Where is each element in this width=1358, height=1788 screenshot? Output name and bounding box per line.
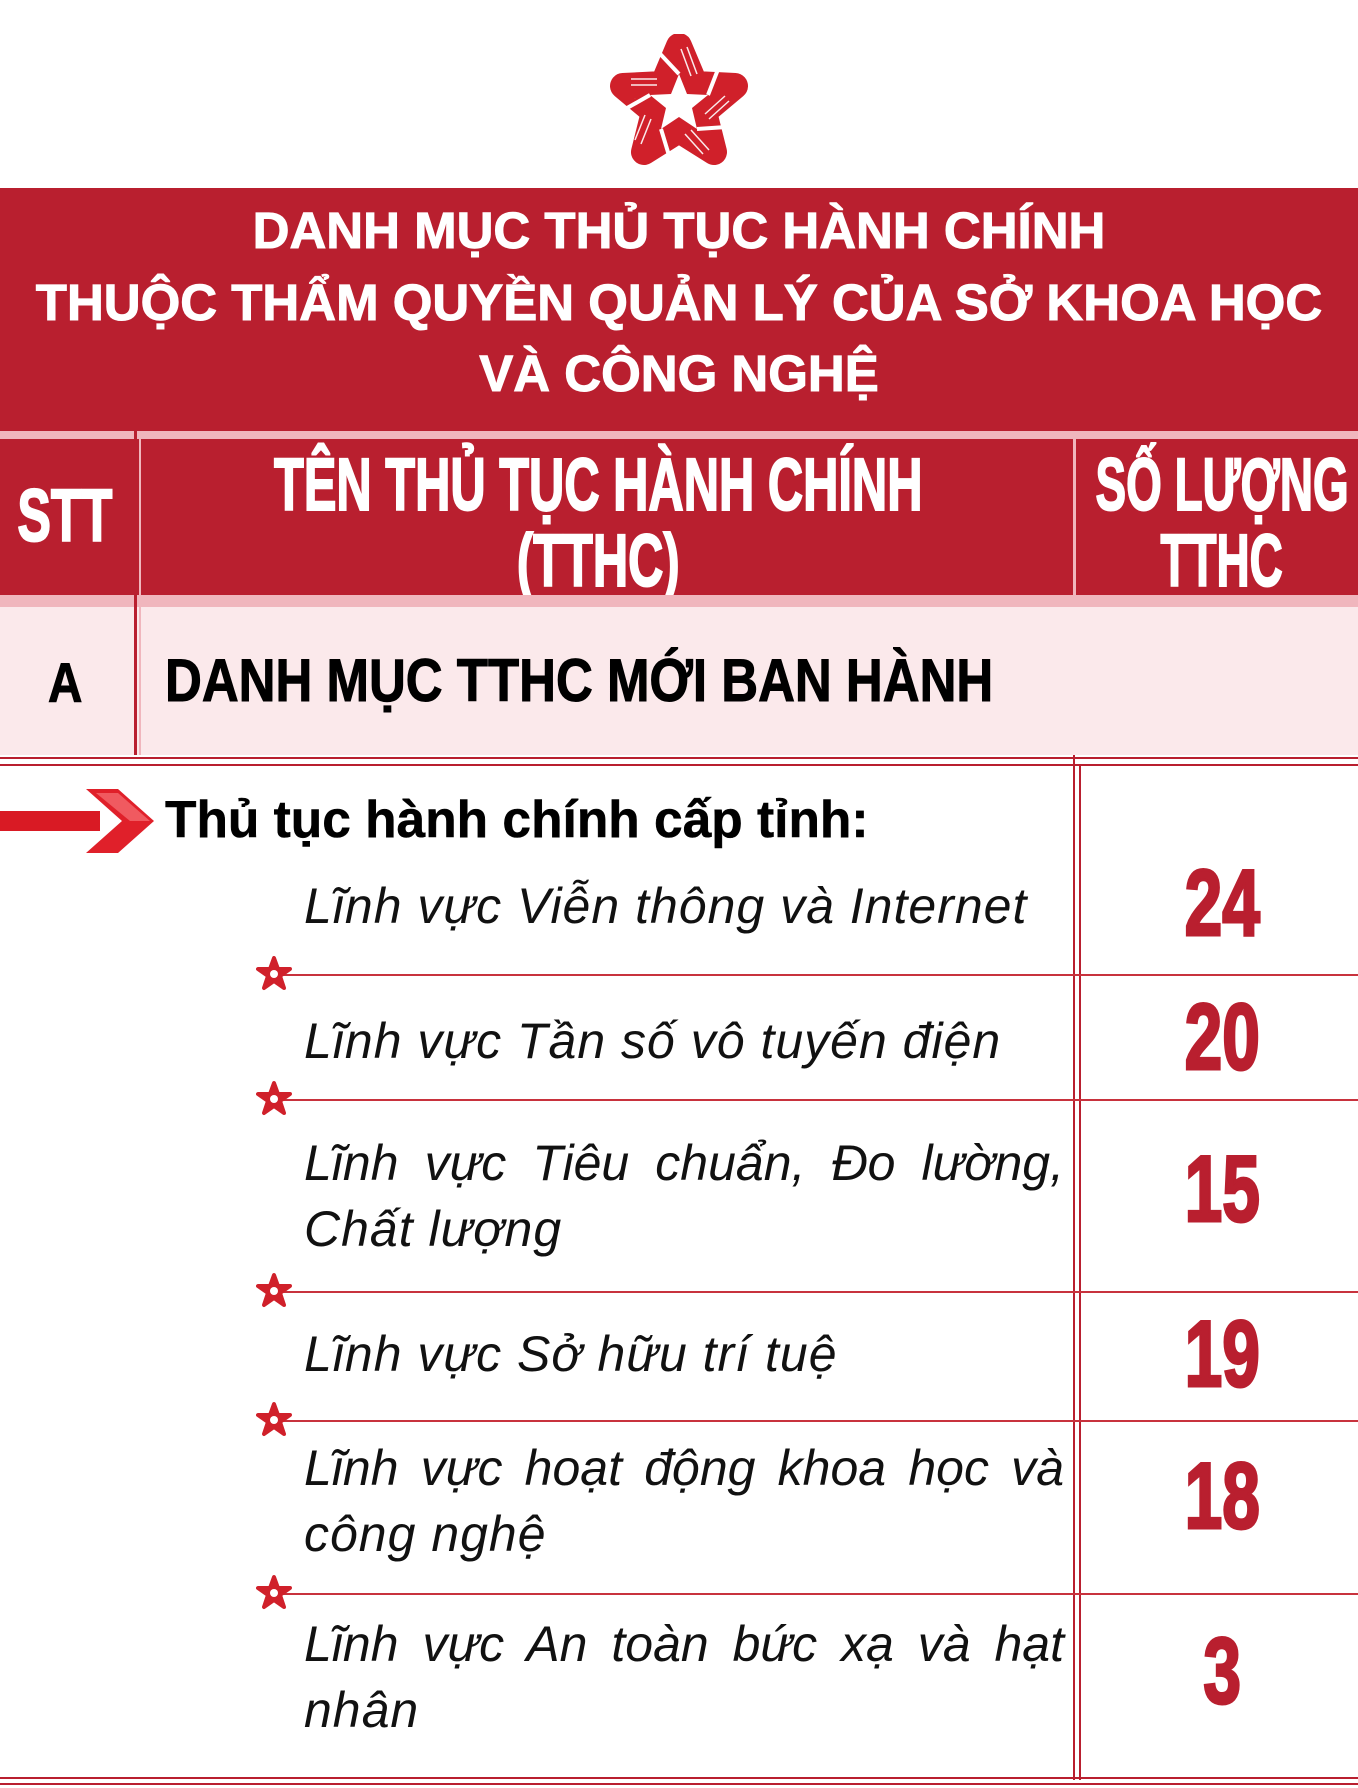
row 6: nhân: [304, 1682, 419, 1738]
row 5: công nghệ: [304, 1506, 547, 1562]
num 3: 3: [1203, 1618, 1241, 1723]
num 20: 20: [1184, 984, 1260, 1089]
title line 2: THUỘC THẨM QUYỀN QUẢN LÝ CỦA SỞ KHOA HỌC: [36, 274, 1322, 331]
row 6: Lĩnh vực An toàn bức xạ và hạt: [304, 1616, 1064, 1672]
header count: TTHC: [1161, 519, 1283, 602]
arrow icon: [0, 789, 154, 853]
title line 1: DANH MỤC THỦ TỤC HÀNH CHÍNH: [253, 202, 1105, 259]
row A: [0, 607, 1358, 755]
header name: [274, 442, 922, 602]
num 18: 18: [1184, 1443, 1260, 1548]
row 3: Lĩnh vực Tiêu chuẩn, Đo lường,: [304, 1135, 1064, 1191]
table header: [0, 439, 1358, 595]
row 3: Chất lượng: [304, 1201, 562, 1257]
row 3: [304, 1135, 1064, 1257]
num 24: 24: [1184, 850, 1260, 955]
logo: [610, 34, 748, 165]
header count: [1095, 442, 1349, 602]
subheading: Thủ tục hành chính cấp tỉnh:: [165, 791, 869, 849]
header STT: STT: [17, 474, 113, 557]
row 4: Lĩnh vực Sở hữu trí tuệ: [304, 1326, 838, 1382]
num 19: 19: [1184, 1301, 1260, 1406]
A label: A: [48, 651, 82, 714]
row 6: [304, 1616, 1066, 1738]
title line 3: VÀ CÔNG NGHỆ: [479, 345, 879, 402]
header count: SỐ LƯỢNG: [1095, 443, 1349, 526]
row lines: [274, 974, 1358, 976]
A text: DANH MỤC TTHC MỚI BAN HÀNH: [165, 647, 993, 714]
star icons: [256, 956, 292, 1610]
row 1: Lĩnh vực Viễn thông và Internet: [304, 878, 1027, 934]
row 5: [304, 1440, 1064, 1562]
row 5: Lĩnh vực hoạt động khoa học và: [304, 1440, 1064, 1496]
header name: (TTHC): [517, 519, 679, 602]
column dividers: [134, 431, 137, 755]
row 2: Lĩnh vực Tần số vô tuyến điện: [304, 1013, 1001, 1069]
title banner: [0, 188, 1358, 431]
num 15: 15: [1184, 1136, 1260, 1241]
header name: TÊN THỦ TỤC HÀNH CHÍNH: [274, 443, 922, 526]
